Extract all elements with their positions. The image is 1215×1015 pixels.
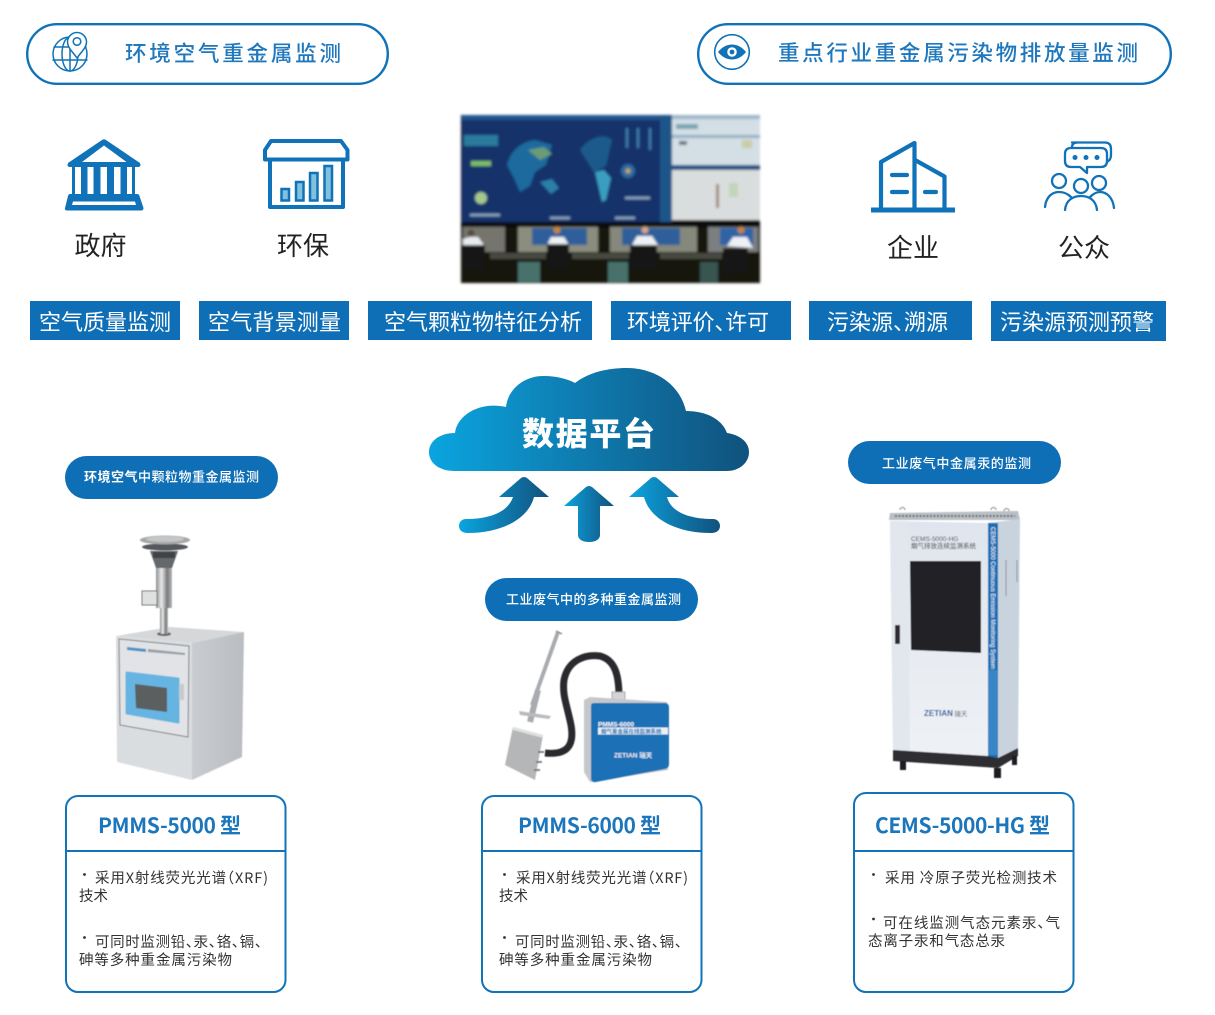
cloud: data platform: 数据平台 <box>522 409 655 455</box>
icon: government building <box>65 139 144 210</box>
card title: PMMS-5000 型 <box>98 810 241 840</box>
pill: mercury in industrial exhaust: 工业废气中金属汞的监测 <box>882 453 1031 472</box>
label: government: 政府 <box>74 226 127 263</box>
card title: CEMS-5000-HG 型 <box>875 810 1050 840</box>
header pill: ambient air heavy metal monitoring <box>27 24 388 84</box>
icon: public people with speech bubble <box>1045 142 1114 210</box>
header pill: key industry emissions monitoring <box>698 24 1171 84</box>
product image: PMMS-6000 probe analyser: ZETIAN 瑞天 <box>614 750 653 760</box>
card title: PMMS-6000 型 <box>518 810 661 840</box>
spec card: CEMS-5000-HG <box>854 793 1074 992</box>
pill: ambient particulate metal monitoring: 环境空气中颗粒物重金属监测 <box>84 466 259 486</box>
pill: multi heavy metal in industrial exhaust: 工业废气中的多种重金属监测 <box>506 589 681 608</box>
card bullet list: 砷等多种重金属污染物 <box>79 949 232 970</box>
tag: environmental assessment and permits <box>611 301 791 340</box>
card bullet list: 可在线监测气态元素汞、气 <box>883 912 1060 933</box>
product image: CEMS-5000-HG cabinet: CEMS-5000-HG <box>911 536 958 543</box>
card bullet list: 可同时监测铅、汞、铬、镉、 <box>515 931 682 952</box>
card bullet list: 采用X射线荧光光谱（XRF) <box>516 867 688 888</box>
arrow: right curved <box>629 477 720 533</box>
product image: CEMS-5000-HG cabinet: CEMS-5000 Continuous Emission Monitoring System <box>989 527 995 669</box>
label: environmental protection: 环保 <box>277 226 329 263</box>
product image: CEMS-5000-HG cabinet: 烟气排放连续监测系统 <box>911 540 976 550</box>
card bullet list <box>79 867 268 970</box>
label: enterprise: 企业 <box>887 228 939 265</box>
pill: mercury in industrial exhaust <box>848 441 1061 484</box>
product image: PMMS-5000 analyser <box>116 536 244 780</box>
icon: globe with location pin <box>53 33 87 71</box>
icon: environmental protection chart box <box>265 141 348 207</box>
product image: CEMS-5000-HG cabinet: ZETIAN 瑞天 <box>924 708 968 718</box>
card bullet list: 可同时监测铅、汞、铬、镉、 <box>95 931 262 952</box>
tag: environmental assessment and permits: 环境评价、许可 <box>627 305 769 337</box>
tag: air background measurement: 空气背景测量 <box>208 305 341 337</box>
heading text: 环境空气重金属监测 <box>125 37 341 68</box>
tag: pollution source tracing <box>809 301 972 340</box>
card bullet list <box>868 867 1060 951</box>
arrows rising into the cloud <box>459 477 720 542</box>
icon: enterprise buildings <box>871 143 955 210</box>
arrow: centre straight <box>564 486 614 542</box>
spec card: PMMS-6000 <box>482 796 702 992</box>
card bullet list: 采用X射线荧光光谱（XRF) <box>95 867 268 888</box>
label: public: 公众 <box>1058 228 1110 265</box>
product image: PMMS-6000 probe analyser: PMMS-6000 <box>598 722 635 728</box>
card bullet list: 技术 <box>499 885 528 906</box>
arrow: left curved <box>459 477 549 533</box>
product image: PMMS-6000 probe analyser <box>505 631 669 782</box>
card bullet list: 技术 <box>79 885 108 906</box>
pill: ambient particulate metal monitoring <box>65 456 278 499</box>
tag: pollution source early warning: 污染源预测预警 <box>1000 305 1154 337</box>
spec card: PMMS-5000 <box>66 796 286 992</box>
tag: particulate characterisation: 空气颗粒物特征分析 <box>384 305 582 337</box>
icon: eye <box>715 35 749 69</box>
card bullet list <box>499 867 688 970</box>
product image: PMMS-6000 probe analyser: 烟气重金属在线监测系统 <box>601 728 662 736</box>
function tags row <box>30 301 1166 341</box>
product image: CEMS-5000-HG cabinet <box>889 508 1020 778</box>
tag: air quality monitoring: 空气质量监测 <box>39 305 171 337</box>
card bullet list: 采用 冷原子荧光检测技术 <box>885 867 1057 888</box>
cloud: data platform <box>429 368 749 471</box>
photo: monitoring control room <box>461 115 760 283</box>
card bullet list: 态离子汞和气态总汞 <box>868 930 1006 951</box>
card bullet list: 砷等多种重金属污染物 <box>499 949 652 970</box>
heading text: 重点行业重金属污染物排放量监测 <box>778 36 1138 68</box>
pill: multi heavy metal in industrial exhaust <box>485 578 698 621</box>
tag: pollution source tracing: 污染源、溯源 <box>827 305 948 337</box>
